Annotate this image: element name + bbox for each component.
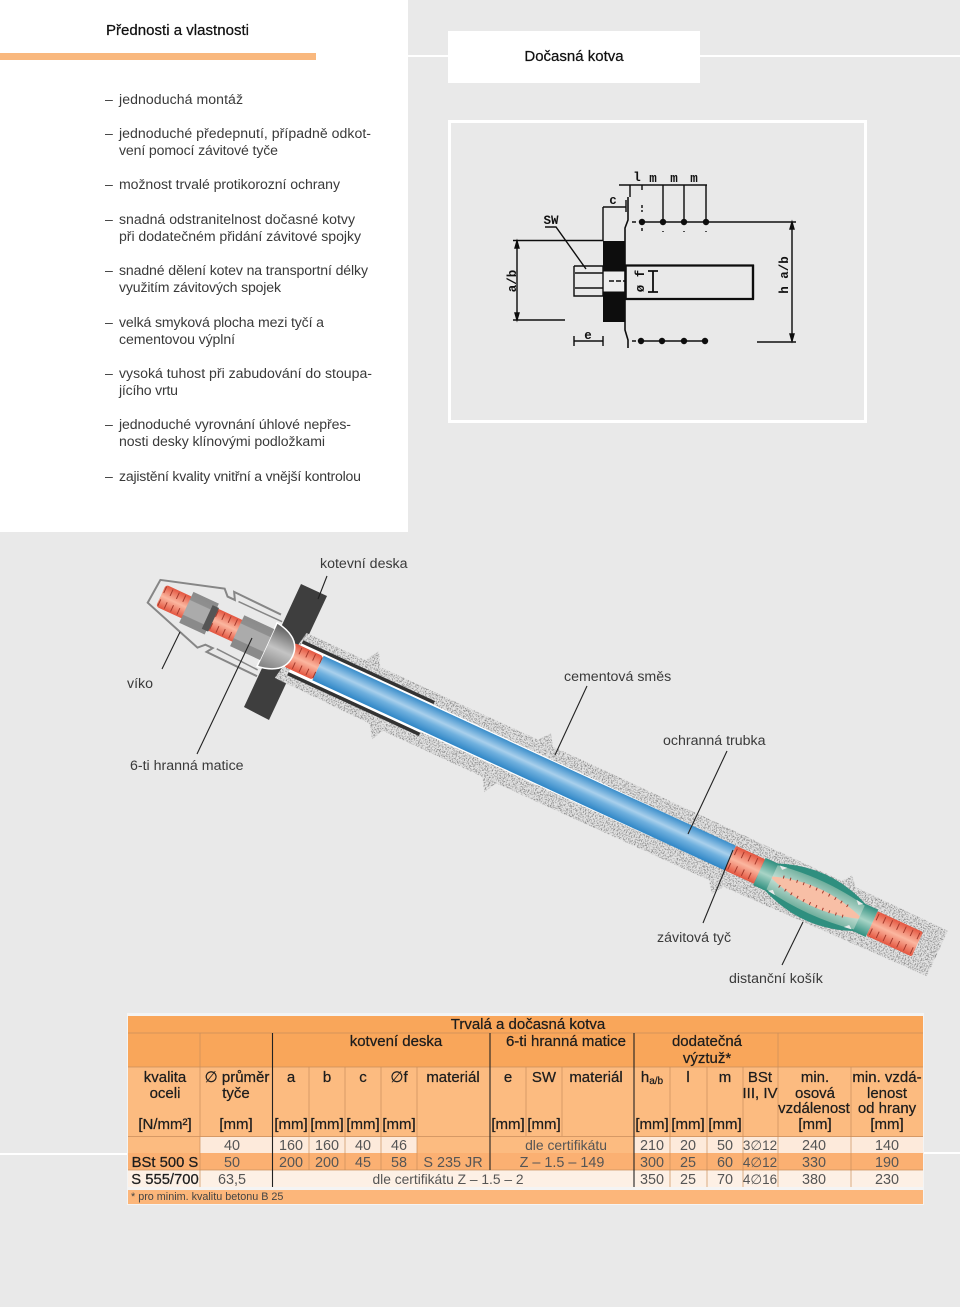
- table header: výztuž*: [683, 1050, 731, 1067]
- table header: [mm]: [382, 1116, 416, 1133]
- label: cementová směs: [555, 669, 671, 755]
- list of properties: –: [105, 91, 113, 107]
- table header: [mm]: [635, 1116, 669, 1133]
- table data rows: S 235 JR: [423, 1155, 483, 1171]
- table data rows: 40: [224, 1138, 240, 1154]
- dimension labels: m: [690, 172, 698, 186]
- table data rows: 230: [875, 1172, 899, 1188]
- table header: dodatečná: [672, 1033, 743, 1050]
- dimension labels: e: [584, 329, 592, 343]
- list of properties: vení pomocí závitové tyče: [119, 142, 278, 158]
- table data rows: S 555/700: [131, 1172, 199, 1188]
- label: 6-ti hranná matice: 6-ti hranná matice: [130, 758, 244, 774]
- table header: BSt: [748, 1069, 773, 1086]
- orange heading bar: [0, 53, 316, 60]
- white rule at top right: [408, 55, 960, 57]
- panel: dimension drawing: [450, 122, 866, 422]
- table data rows: [131, 1137, 899, 1188]
- table header: od hrany: [858, 1100, 917, 1117]
- list of properties: velká smyková plocha mezi tyčí a: [119, 314, 324, 330]
- label: distanční košík: [729, 922, 824, 987]
- table header: l: [686, 1069, 690, 1086]
- table header: h: [641, 1069, 649, 1086]
- table data rows: BSt 500 S: [132, 1155, 198, 1171]
- list of properties: –: [105, 125, 113, 141]
- illustration: anchor cross-section: [135, 555, 955, 993]
- list of properties: –: [105, 468, 113, 484]
- table data rows: 25: [680, 1155, 696, 1171]
- table data rows: 200: [315, 1155, 339, 1171]
- table header: [mm]: [527, 1116, 561, 1133]
- list of properties: –: [105, 262, 113, 278]
- table data rows: 200: [279, 1155, 303, 1171]
- cement grout: [268, 616, 955, 993]
- table header: kvalita: [144, 1069, 187, 1086]
- table header: 6-ti hranná matice: [506, 1033, 626, 1050]
- table header: a: [287, 1069, 296, 1086]
- dimension labels: ø f: [634, 270, 648, 292]
- dimension labels: [506, 171, 792, 343]
- table header: ∅ průměr: [205, 1069, 269, 1086]
- label: distanční košík: distanční košík: [729, 971, 824, 987]
- list of properties: snadná odstranitelnost dočasné kotvy: [119, 211, 356, 227]
- label: cementová směs: cementová směs: [564, 669, 671, 685]
- list of properties: –: [105, 365, 113, 381]
- dimension labels: a/b: [506, 270, 520, 292]
- table header: vzdálenost: [778, 1100, 851, 1117]
- list of properties: jícího vrtu: [118, 382, 178, 398]
- table header: [mm]: [671, 1116, 705, 1133]
- hex nuts and inner thread: [154, 580, 274, 660]
- list of properties: –: [105, 211, 113, 227]
- table footnote: * pro minim. kvalitu betonu B 25: [131, 1191, 283, 1203]
- table: anchor dimensions: [127, 1013, 924, 1205]
- list of properties: [105, 91, 372, 484]
- anchor plate: [244, 584, 327, 720]
- table data rows: 140: [875, 1138, 899, 1154]
- table data rows: 50: [717, 1138, 733, 1154]
- label: závitová tyč: závitová tyč: [657, 930, 731, 946]
- table header: tyče: [222, 1085, 250, 1102]
- label: ochranná trubka: ochranná trubka: [663, 733, 766, 749]
- list of properties: cementovou výplní: [119, 331, 235, 347]
- table data rows: Z – 1.5 – 149: [520, 1155, 604, 1171]
- blue sheathed rod: [312, 656, 736, 870]
- table grid: [128, 1033, 923, 1187]
- table data rows: 160: [279, 1138, 303, 1154]
- table header: c: [359, 1069, 367, 1086]
- table header: m: [719, 1069, 731, 1086]
- table data rows: dle certifikátu: [525, 1137, 607, 1153]
- table data rows: 160: [315, 1138, 339, 1154]
- table data rows: 58: [391, 1155, 407, 1171]
- table header: [mm]: [346, 1116, 380, 1133]
- dome nut: [257, 623, 303, 678]
- table header: a/b: [649, 1076, 664, 1087]
- table data rows: 380: [802, 1172, 826, 1188]
- table header: osová: [795, 1085, 836, 1102]
- list of properties: jednoduché předepnutí, případně odkot-: [118, 125, 371, 141]
- table header: III, IV: [742, 1085, 778, 1102]
- table header: [mm]: [870, 1116, 904, 1133]
- drawing: anchor dimensions: [513, 185, 796, 348]
- list of properties: snadné dělení kotev na transportní délky: [119, 262, 369, 278]
- white rule behind table: [0, 1152, 960, 1155]
- label: závitová tyč: [657, 850, 733, 946]
- list of properties: jednoduché vyrovnání úhlové nepřes-: [118, 416, 351, 432]
- table header: ∅f: [390, 1069, 408, 1086]
- table header: e: [504, 1069, 512, 1086]
- table header: Trvalá a dočasná kotva: [451, 1016, 606, 1033]
- table header: [138, 1016, 922, 1133]
- protective tube: [287, 640, 738, 876]
- label: 6-ti hranná matice: [130, 638, 252, 774]
- list of properties: nosti desky klínovými podložkami: [119, 433, 325, 449]
- table data rows: 240: [802, 1138, 826, 1154]
- table header: oceli: [150, 1085, 180, 1102]
- end cap outline: [139, 561, 285, 676]
- table header: materiál: [426, 1069, 480, 1086]
- table header: [mm]: [274, 1116, 308, 1133]
- label: kotevní deska: kotevní deska: [320, 556, 408, 572]
- table data rows: 25: [680, 1172, 696, 1188]
- label: ochranná trubka: [663, 733, 766, 834]
- table header: [mm]: [219, 1116, 253, 1133]
- table data rows: dle certifikátu Z – 1.5 – 2: [372, 1172, 524, 1187]
- table data rows: 40: [355, 1138, 371, 1154]
- title tab: Dočasná kotva: [448, 31, 700, 83]
- table data rows: 50: [224, 1155, 240, 1171]
- list of properties: využitím závitových spojek: [119, 279, 282, 295]
- table header: [mm]: [491, 1116, 525, 1133]
- table data rows: 4∅12: [743, 1155, 777, 1170]
- table header: [mm]: [798, 1116, 832, 1133]
- list of properties: –: [105, 314, 113, 330]
- table data rows: 60: [717, 1155, 733, 1171]
- table data rows: 4∅16: [743, 1172, 777, 1187]
- list of properties: jednoduchá montáž: [118, 91, 243, 107]
- table data rows: 45: [355, 1155, 371, 1171]
- table header: min. vzdá-: [852, 1069, 922, 1086]
- title tab: Dočasná kotva: Dočasná kotva: [524, 48, 624, 65]
- table header: kotvení deska: [350, 1033, 443, 1050]
- table data rows: 46: [391, 1138, 407, 1154]
- table data rows: 3∅12: [743, 1138, 777, 1153]
- table header: lenost: [867, 1085, 908, 1102]
- table header: min.: [801, 1069, 829, 1086]
- table data rows: 350: [640, 1172, 664, 1188]
- table header: [N/mm²]: [138, 1116, 192, 1133]
- dimension labels: SW: [543, 214, 559, 228]
- table data rows: 210: [640, 1138, 664, 1154]
- dimension labels: h a/b: [778, 256, 792, 294]
- dimension labels: l: [633, 171, 641, 185]
- label: kotevní deska: [318, 556, 408, 599]
- list of properties: vysoká tuhost při zabudování do stoupa-: [119, 365, 372, 381]
- table data rows: 20: [680, 1138, 696, 1154]
- table backgrounds: [128, 1016, 923, 1204]
- table data rows: 300: [640, 1155, 664, 1171]
- list of properties: možnost trvalé protikorozní ochrany: [119, 176, 341, 192]
- panel: advantages and properties: [0, 0, 408, 532]
- dimension labels: m: [670, 172, 678, 186]
- label: víko: víko: [127, 676, 153, 692]
- table header: [mm]: [310, 1116, 344, 1133]
- list of properties: zajistění kvality vnitřní a vnější kontrolou: [119, 468, 361, 484]
- table header: b: [323, 1069, 331, 1086]
- label: víko: [127, 632, 180, 692]
- list of properties: –: [105, 176, 113, 192]
- table data rows: 330: [802, 1155, 826, 1171]
- table header: [mm]: [708, 1116, 742, 1133]
- table header: SW: [532, 1069, 557, 1086]
- list of properties: při dodatečném přidání závitové spojky: [119, 228, 362, 244]
- list of properties: –: [105, 416, 113, 432]
- dimension labels: c: [609, 194, 617, 208]
- threaded bar sections: [283, 642, 923, 957]
- spacer basket: [749, 849, 882, 946]
- dimension labels: m: [649, 172, 657, 186]
- heading: Přednosti a vlastnosti: Přednosti a vlastnosti: [106, 22, 249, 39]
- table data rows: 63,5: [218, 1172, 246, 1188]
- table data rows: 190: [875, 1155, 899, 1171]
- table data rows: 70: [717, 1172, 733, 1188]
- table header: materiál: [569, 1069, 623, 1086]
